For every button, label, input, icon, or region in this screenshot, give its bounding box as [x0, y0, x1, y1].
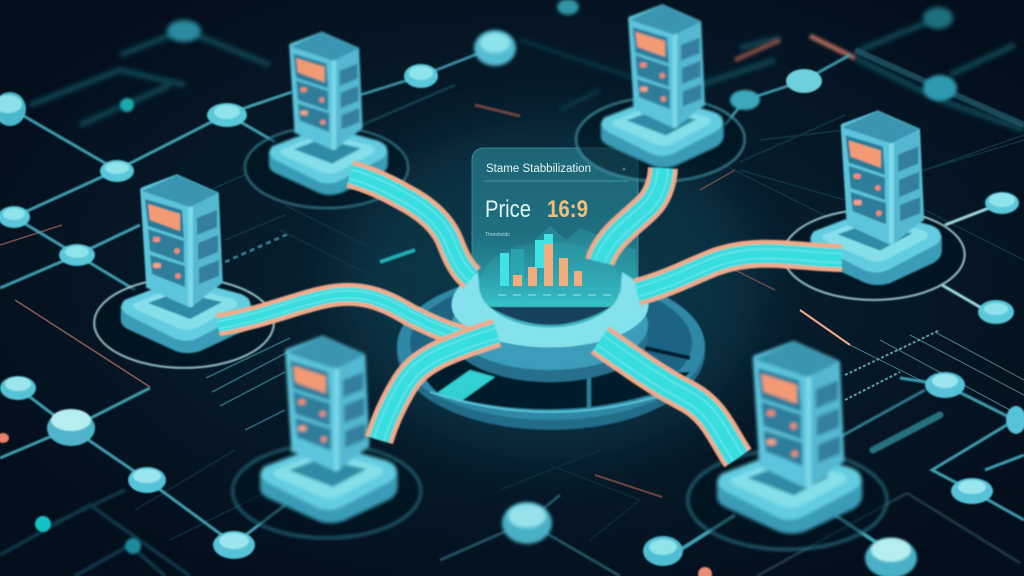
- chart caption: Thresholds: [485, 232, 510, 238]
- ribbon: right server: [637, 254, 842, 292]
- ribbon: top left server: [350, 174, 472, 278]
- node cluster bottom left: [0, 376, 255, 559]
- bar chart: [498, 226, 636, 295]
- hub disc: [452, 242, 648, 382]
- server: top right: [576, 5, 745, 182]
- heading: Stame Stabbilization: [486, 163, 591, 175]
- server: top left: [245, 32, 408, 208]
- server: left: [94, 175, 274, 368]
- outer ring: [397, 272, 705, 430]
- price label: Price: [485, 196, 531, 223]
- server: bottom left: [232, 336, 421, 538]
- ribbon: top right server: [600, 168, 663, 262]
- server: bottom right: [687, 342, 887, 550]
- ribbon: left server: [218, 294, 465, 337]
- price value: 16:9: [547, 196, 588, 223]
- panel: price dashboard: [472, 148, 638, 307]
- hub platform: [397, 242, 705, 430]
- node cluster right: [925, 192, 1024, 504]
- node cluster left: [0, 92, 247, 266]
- server: right: [783, 111, 965, 300]
- hub front rim: [452, 272, 648, 347]
- node cluster bottom: [502, 502, 917, 576]
- ribbon: bottom right server: [600, 340, 738, 458]
- data ribbons: [218, 168, 842, 458]
- ribbon: bottom left server: [379, 333, 497, 440]
- node cluster top: [167, 0, 957, 110]
